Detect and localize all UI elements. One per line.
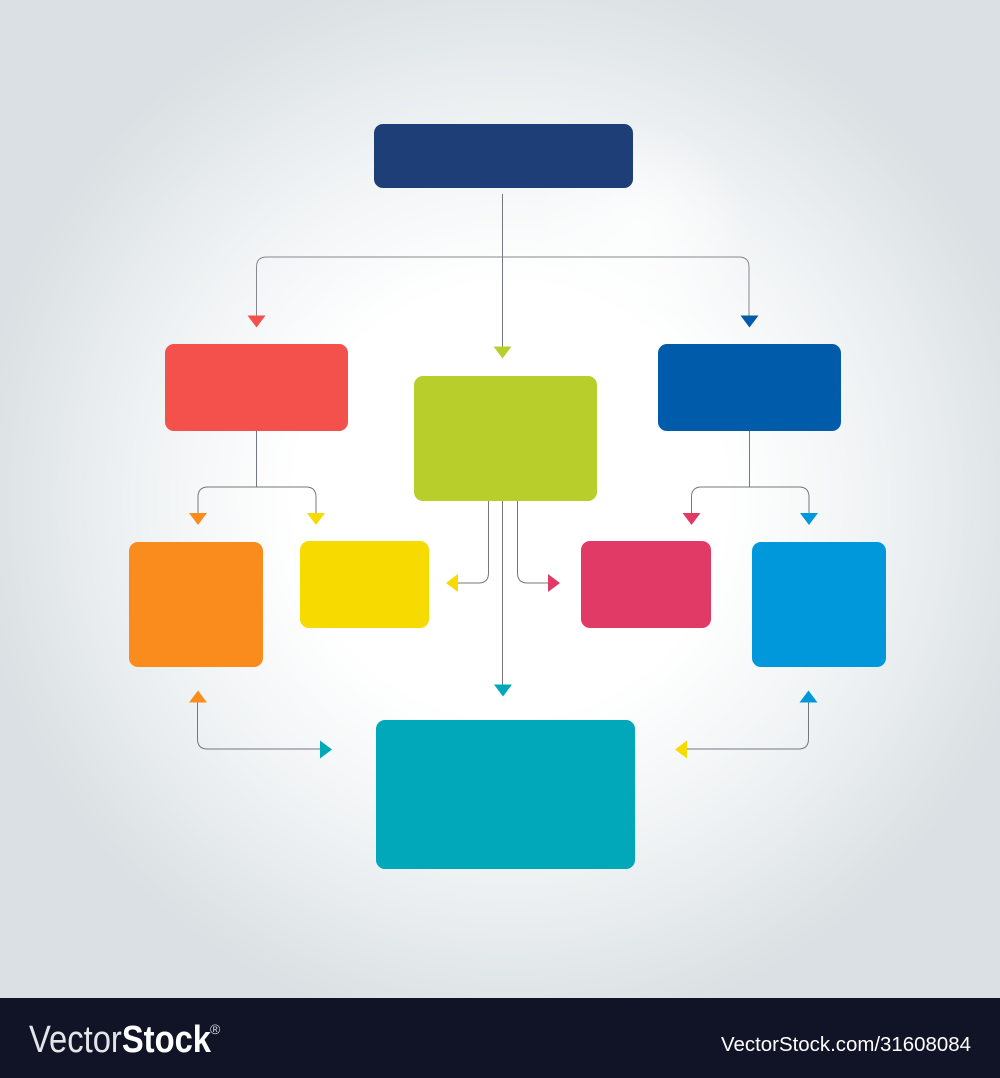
box: orange: [129, 542, 263, 667]
arrow: to yellow: [307, 513, 325, 525]
arrow: to sky blue: [800, 513, 818, 525]
footer bar: [0, 998, 1000, 1078]
arrow: to red: [248, 316, 266, 328]
box: lime: [414, 376, 597, 501]
arrow: to blue: [740, 316, 758, 328]
connector lines: [198, 194, 809, 749]
registered mark: ®: [210, 1021, 221, 1037]
footer url: VectorStock.com/31608084: [721, 1034, 971, 1056]
arrow: to orange: [189, 513, 207, 525]
box: teal: [376, 720, 635, 869]
arrow: down to teal: [494, 684, 512, 696]
arrow: right to crimson: [548, 574, 560, 592]
box: blue: [658, 344, 841, 431]
arrow: left to teal: [675, 740, 687, 758]
arrow: to lime: [494, 346, 512, 358]
arrow: up to orange: [189, 690, 207, 702]
arrow: right to teal: [320, 740, 332, 758]
box: red: [165, 344, 348, 431]
arrow: to crimson: [682, 513, 700, 525]
box: top navy: [374, 124, 633, 188]
box: sky blue: [752, 542, 886, 667]
footer logo: VectorStock: [29, 1019, 212, 1061]
box: crimson: [581, 541, 711, 628]
arrow: up to sky blue: [800, 690, 818, 702]
box: yellow: [300, 541, 429, 628]
arrow: left to yellow: [446, 574, 458, 592]
